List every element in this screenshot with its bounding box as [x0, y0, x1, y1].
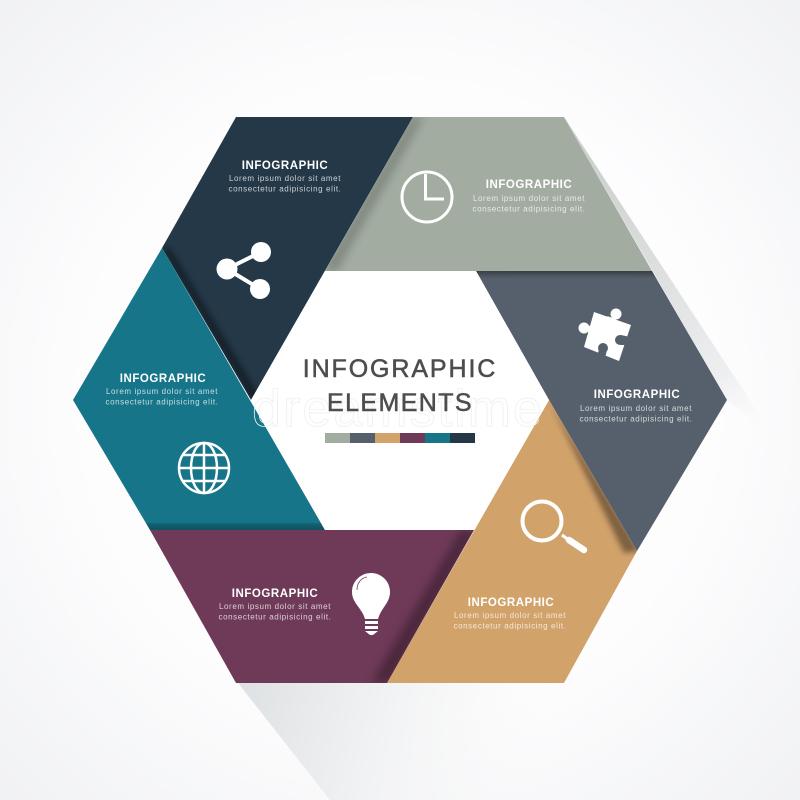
infographic hexagon	[73, 117, 727, 683]
heading: tan: INFOGRAPHIC	[468, 597, 554, 609]
icon: puzzle piece	[578, 308, 631, 361]
heading: teal: INFOGRAPHIC	[120, 373, 206, 385]
text: tan: Lorem ipsum dolor sit amet	[454, 611, 566, 620]
panel: teal segment	[73, 248, 330, 536]
long shadow: bottom	[238, 683, 640, 800]
text: sage: consectetur adipisicing elit.	[472, 204, 586, 214]
long shadow: right	[564, 117, 772, 434]
heading: sage: INFOGRAPHIC	[486, 179, 572, 191]
text: teal: consectetur adipisicing elit.	[105, 398, 219, 406]
panel: center hexagon	[251, 271, 549, 530]
text: teal: Lorem ipsum dolor sit amet	[106, 387, 218, 396]
title: INFOGRAPHIC	[303, 355, 497, 383]
icon: light bulb	[352, 573, 390, 635]
text: tan: consectetur adipisicing elit.	[453, 622, 567, 630]
icon: globe	[179, 443, 229, 493]
heading: plum: INFOGRAPHIC	[232, 588, 318, 600]
panel: slate segment	[470, 262, 727, 551]
panel: navy segment	[162, 117, 413, 400]
text: plum: consectetur adipisicing elit.	[218, 612, 332, 622]
text: slate: Lorem ipsum dolor sit amet	[580, 404, 692, 413]
text: navy: Lorem ipsum dolor sit amet	[229, 174, 341, 183]
text: navy: consectetur adipisicing elit.	[228, 184, 342, 194]
icon: share network	[216, 242, 271, 299]
panel: tan segment	[387, 400, 640, 683]
icon: clock	[402, 172, 452, 222]
panel: sage segment	[325, 117, 652, 271]
subtitle: ELEMENTS	[327, 389, 473, 417]
watermark: dreamstime	[252, 380, 544, 438]
icon: magnifier	[522, 502, 584, 550]
colour legend bar	[325, 433, 475, 443]
text: slate: consectetur adipisicing elit.	[579, 414, 693, 424]
panel: plum segment	[150, 530, 476, 683]
text: sage: Lorem ipsum dolor sit amet	[473, 194, 585, 203]
heading: navy: INFOGRAPHIC	[242, 160, 328, 172]
text: plum: Lorem ipsum dolor sit amet	[219, 602, 331, 611]
heading: slate: INFOGRAPHIC	[594, 389, 680, 401]
